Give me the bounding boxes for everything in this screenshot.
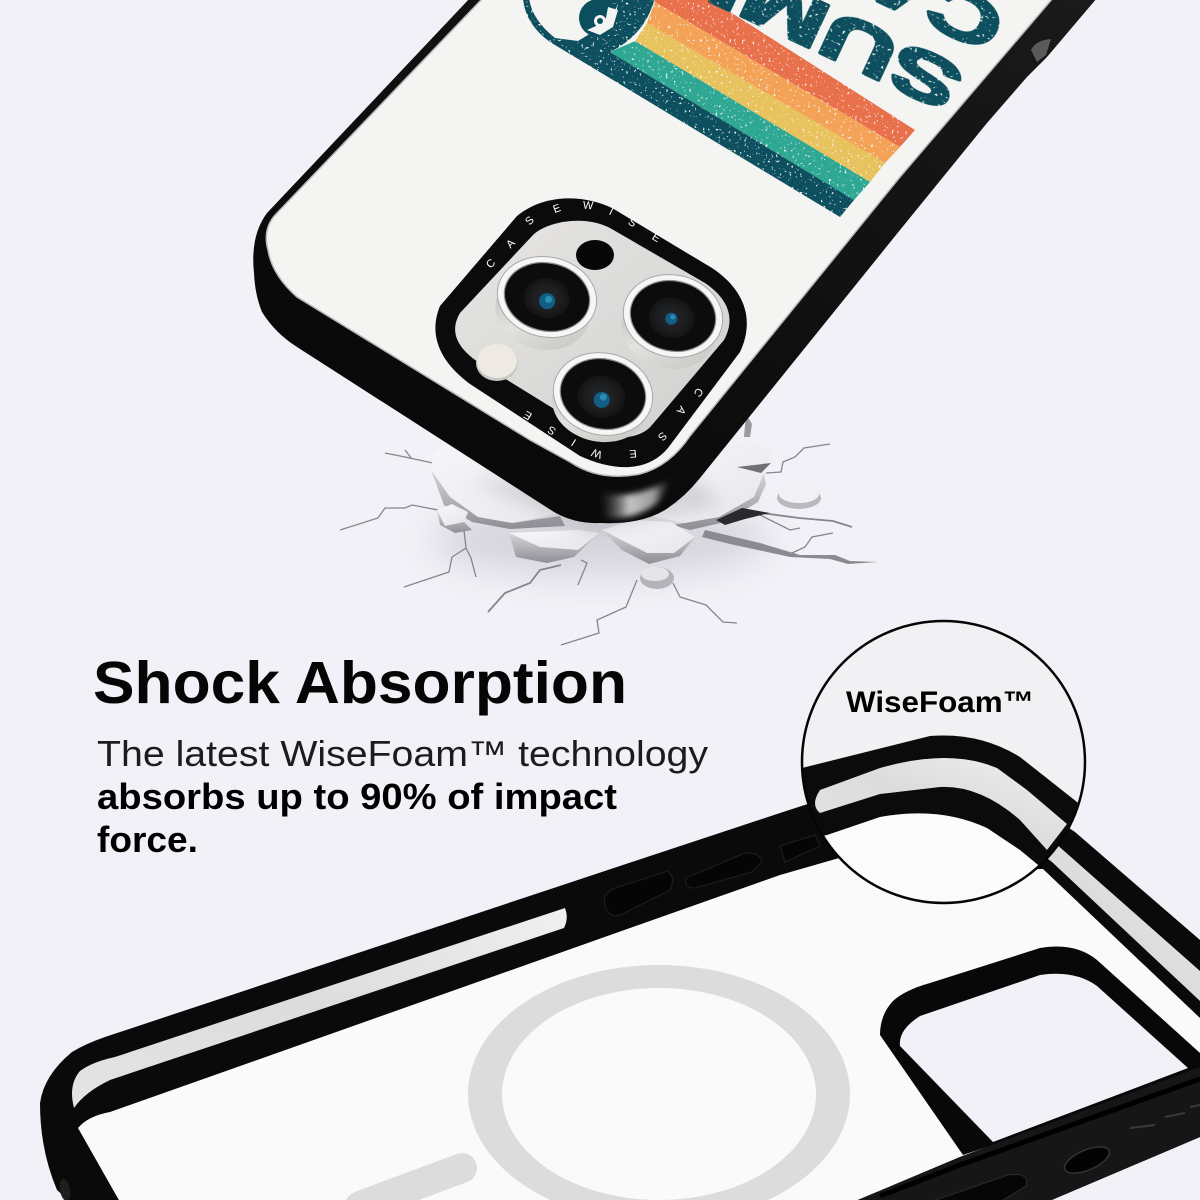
magnifier callout xyxy=(800,620,1086,904)
top phone with case xyxy=(253,0,1097,523)
loupe outline xyxy=(802,621,1085,903)
long wedge crack xyxy=(702,530,878,564)
case outer frame xyxy=(40,775,1200,1200)
brand text on camera ring: E xyxy=(551,202,563,216)
cracked ground impact xyxy=(340,414,878,645)
foam strip left xyxy=(72,908,567,1108)
body line two: absorbs up to 90% of impact xyxy=(97,776,617,817)
loupe disc xyxy=(802,621,1085,903)
crack lines xyxy=(340,444,852,645)
chunk: small right xyxy=(777,485,821,509)
lens two xyxy=(613,266,730,378)
flash xyxy=(476,344,518,381)
bottom phone case, inside view xyxy=(40,775,1200,1200)
lower frame edge xyxy=(853,1067,1200,1200)
dark gap xyxy=(716,508,770,525)
port slot xyxy=(1061,1141,1113,1179)
body line one: The latest WiseFoam™ technology xyxy=(97,733,708,774)
bumper highlight xyxy=(600,478,672,518)
vinyl record xyxy=(579,0,618,37)
record capsule xyxy=(523,0,854,217)
loupe label: WiseFoam™ xyxy=(846,686,1034,719)
magnet ring xyxy=(468,965,850,1200)
shadow cast by phone xyxy=(470,480,720,535)
magnified outer band xyxy=(803,736,1078,865)
chunk: mid left xyxy=(509,530,599,563)
magnified panel xyxy=(824,813,1038,902)
side buttons xyxy=(604,835,820,916)
magnet pill xyxy=(360,1168,462,1200)
soft shadow around crater xyxy=(430,504,770,576)
rainbow stripes xyxy=(523,0,915,217)
body line three: force. xyxy=(97,819,198,860)
camera plate xyxy=(455,221,730,437)
body text xyxy=(97,733,708,860)
lower side button xyxy=(930,1174,1027,1200)
brand text on camera ring: I xyxy=(607,206,615,218)
chunk: small bottom xyxy=(640,567,674,589)
camera cutout opening xyxy=(900,974,1188,1142)
magnified frame xyxy=(803,736,1078,902)
brand text on camera ring: A xyxy=(504,237,518,251)
brand text on camera ring: E xyxy=(522,408,534,422)
brand text on camera ring xyxy=(484,200,705,460)
brand text on camera ring: C xyxy=(484,257,498,271)
brand text on camera ring: I xyxy=(570,436,578,448)
lens one xyxy=(487,247,604,359)
top-edge sliver xyxy=(744,414,752,437)
camera cutout frame xyxy=(880,946,1200,1155)
brand text on camera ring: S xyxy=(655,429,669,443)
left plate xyxy=(431,430,600,523)
foam strip right xyxy=(1030,830,1200,1001)
brand text on camera ring: S xyxy=(546,423,558,437)
grip texture xyxy=(1130,1105,1200,1128)
brand text on camera ring: S xyxy=(626,216,638,230)
camera ring xyxy=(435,198,747,467)
right plate xyxy=(630,440,771,523)
brand text on camera ring: W xyxy=(589,445,604,460)
brand text on camera ring: E xyxy=(629,447,637,459)
lidar sensor xyxy=(576,240,614,270)
brand text on camera ring: E xyxy=(650,231,662,245)
retro artwork xyxy=(517,0,1015,217)
side button highlight xyxy=(1031,39,1051,62)
charging port notch xyxy=(58,1178,72,1200)
capsule white interior xyxy=(529,0,592,41)
back panel xyxy=(266,0,1053,476)
chunk: small left xyxy=(437,504,472,533)
lens three xyxy=(544,344,660,451)
brand text on camera ring: S xyxy=(523,214,537,228)
magnified foam xyxy=(815,758,1067,850)
clear back panel xyxy=(78,844,1200,1200)
brand text on camera ring: W xyxy=(582,200,594,212)
brand text on camera ring: C xyxy=(691,385,705,399)
brand text on camera ring: A xyxy=(674,403,688,417)
chunk: mid right xyxy=(602,520,695,564)
camera island xyxy=(435,198,747,467)
phone case outer black frame xyxy=(253,0,1097,523)
wedge on right plate xyxy=(737,463,771,473)
heading: Shock Absorption xyxy=(93,650,627,716)
